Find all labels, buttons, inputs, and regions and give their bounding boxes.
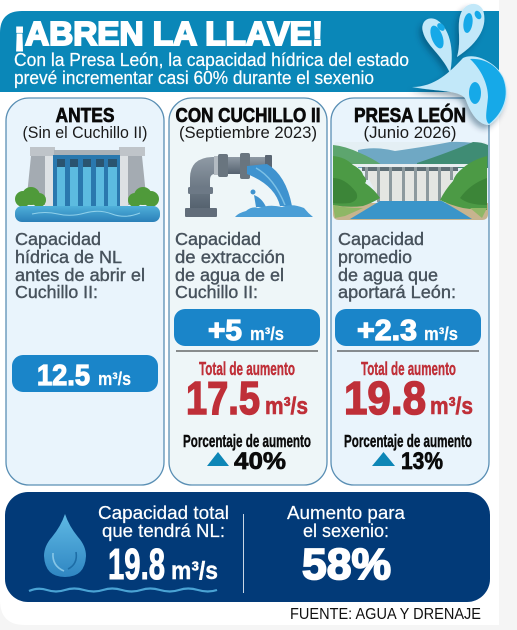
percentage value: 40% — [234, 448, 286, 475]
value pill — [335, 309, 481, 347]
description: Cuchillo II: — [15, 282, 98, 302]
value pill: +2.3 — [357, 315, 417, 347]
description: Capacidad — [175, 229, 261, 249]
subheading: (Septiembre 2023) — [179, 123, 317, 142]
icon: water splash — [412, 4, 507, 125]
header banner — [0, 11, 499, 92]
percentage value — [207, 448, 286, 475]
total capacity value: 19.8 — [108, 540, 165, 589]
wave — [29, 588, 217, 592]
value pill — [174, 309, 320, 347]
total value — [344, 372, 473, 424]
percentage value — [372, 448, 443, 475]
icon: pipe with water — [185, 153, 313, 217]
description: promedio — [338, 247, 412, 267]
total capacity text: Capacidad total — [98, 503, 229, 523]
image: dam landscape — [333, 142, 488, 220]
subtitle: prevé incrementar casi 60% durante el sexenio — [14, 68, 374, 88]
heading: presa leon: PRESA LEÓN — [354, 103, 466, 127]
title: ¡ABREN LA LLAVE! — [14, 15, 323, 52]
value pill — [12, 355, 158, 392]
description — [338, 229, 456, 302]
increase text — [287, 503, 406, 541]
panel: total summary — [5, 492, 490, 602]
value pill: 12.5 — [37, 360, 90, 392]
total value: m³/s — [265, 393, 308, 420]
description: Cuchillo II: — [175, 282, 258, 302]
value pill: m³/s — [424, 324, 458, 344]
total capacity text: que tendrá NL: — [102, 521, 225, 541]
icon: dam — [15, 147, 160, 222]
increase text: Aumento para — [287, 503, 406, 523]
total capacity value: m³/s — [171, 557, 218, 585]
description: Capacidad — [15, 229, 101, 249]
increase text: el sexenio: — [303, 521, 389, 541]
description: hídrica de NL — [15, 247, 122, 267]
description: aportará León: — [338, 282, 456, 302]
percentage value: 13% — [401, 448, 443, 475]
total label: Total de aumento — [361, 358, 456, 379]
subtitle: Con la Presa León, la capacidad hídrica del estado — [14, 50, 409, 70]
total label: Total de aumento — [199, 358, 295, 379]
panel: presa leon — [331, 98, 489, 485]
heading: con cuchillo II: CON CUCHILLO II — [176, 105, 320, 127]
icon: water drop — [44, 514, 86, 577]
total value: 19.8 — [344, 372, 426, 424]
description: antes de abrir el — [15, 265, 145, 285]
description — [175, 229, 285, 302]
panel: antes — [6, 98, 164, 485]
percentage label: Porcentaje de aumento — [183, 431, 311, 451]
total value: 17.5 — [186, 372, 260, 424]
description: de extracción — [175, 247, 285, 267]
subtitle — [14, 50, 409, 88]
value pill: +5 — [208, 315, 242, 347]
total capacity text — [98, 503, 229, 541]
value pill: m³/s — [98, 369, 131, 389]
description: Capacidad — [338, 229, 424, 249]
source: FUENTE: AGUA Y DRENAJE — [290, 606, 481, 623]
value pill: m³/s — [250, 324, 284, 344]
subheading: (Junio 2026) — [364, 123, 456, 142]
description — [15, 229, 145, 302]
description: de agua que — [338, 265, 438, 285]
description: de agua de el — [175, 265, 284, 285]
subheading: (Sin el Cuchillo II) — [22, 123, 148, 142]
heading: antes: ANTES — [56, 105, 114, 127]
increase value: 58% — [302, 540, 391, 589]
total value: m³/s — [430, 393, 473, 420]
panel: con cuchillo II — [169, 98, 327, 485]
